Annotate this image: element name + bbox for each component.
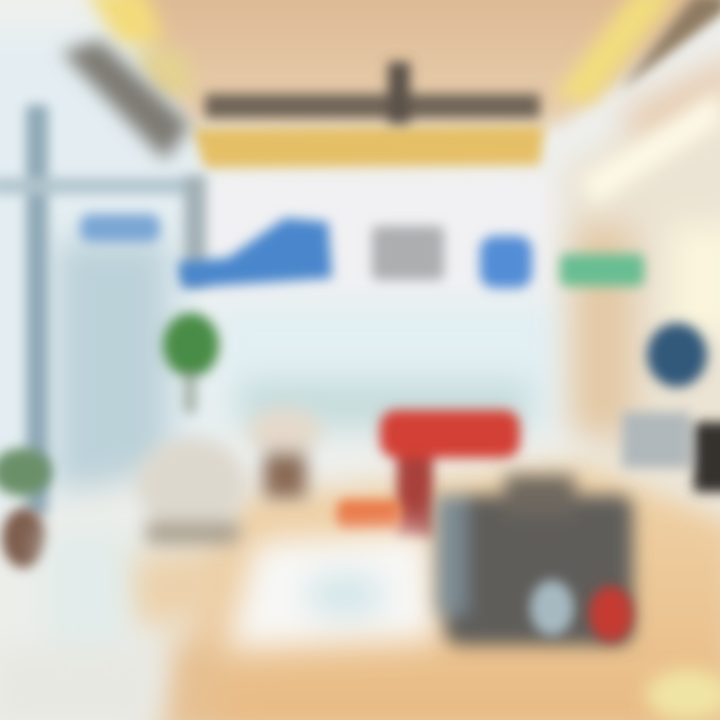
yellow ceiling beam (192, 125, 545, 168)
left window wall (0, 30, 210, 720)
ceiling lights (85, 0, 720, 205)
upper right dark ceiling edge (620, 0, 720, 90)
orange cushion (337, 500, 401, 530)
ceiling (110, 0, 720, 125)
window column (0, 105, 206, 515)
right wall (560, 50, 720, 510)
dark diagonal beam (62, 40, 190, 160)
red cushion (589, 586, 633, 642)
beige armchair (137, 437, 247, 544)
dark blue round object (647, 323, 707, 387)
floor plant left (0, 448, 52, 568)
left foreground white furniture (0, 530, 160, 720)
pale blue cushion (530, 580, 574, 636)
blue sign left (80, 214, 160, 242)
grey panel (372, 226, 444, 280)
hanging plant (163, 313, 219, 413)
floor glow (646, 669, 720, 720)
dark grey sofa (436, 475, 633, 645)
blue mountain shape (178, 218, 332, 288)
floor (110, 460, 720, 720)
dark ceiling band (205, 62, 540, 124)
blue panel right (480, 236, 532, 288)
green sign (560, 254, 644, 286)
right console (622, 412, 720, 492)
red sofa (380, 410, 520, 538)
white rug (225, 530, 440, 650)
panoramic window (215, 300, 560, 430)
back chair and side table (249, 408, 321, 498)
back wall (205, 175, 555, 305)
